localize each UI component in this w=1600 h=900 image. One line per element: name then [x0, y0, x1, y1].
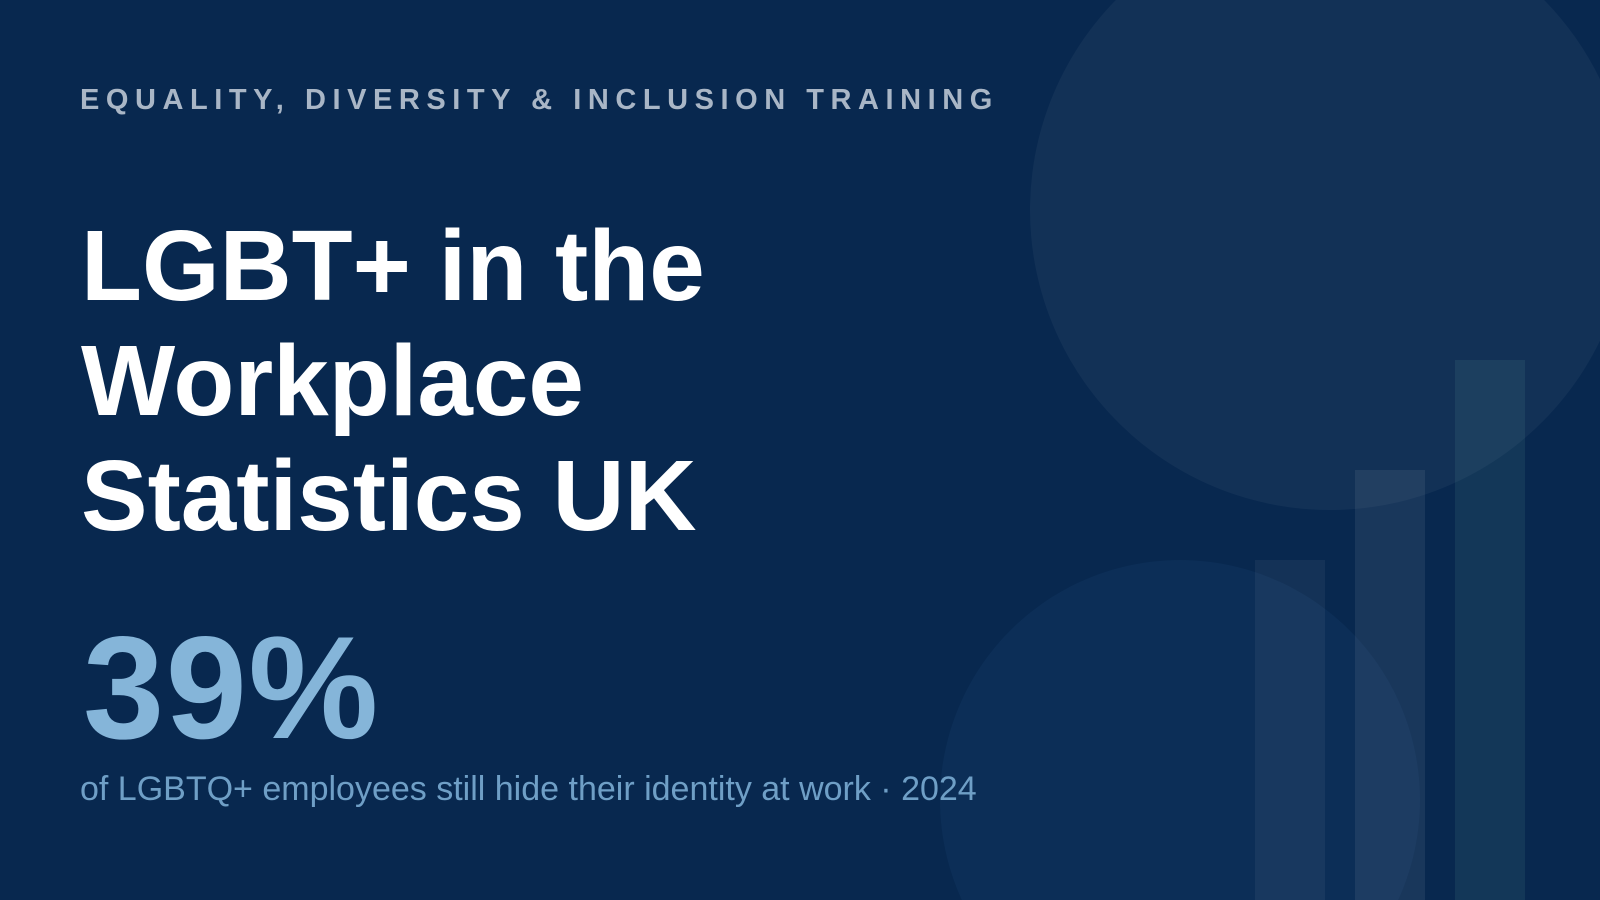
title: LGBT+ in the [81, 211, 705, 322]
eyebrow heading: EQUALITY, DIVERSITY & INCLUSION TRAINING [80, 84, 999, 116]
bar chart motif [1255, 360, 1525, 900]
title [81, 211, 705, 552]
statistic caption: of LGBTQ+ employees still hide their identity at work · 2024 [80, 770, 977, 808]
title: Workplace [81, 326, 584, 437]
title: Statistics UK [81, 441, 697, 552]
lower circle [940, 560, 1420, 900]
key statistic: 39% [83, 606, 380, 769]
large circle [1030, 0, 1600, 510]
